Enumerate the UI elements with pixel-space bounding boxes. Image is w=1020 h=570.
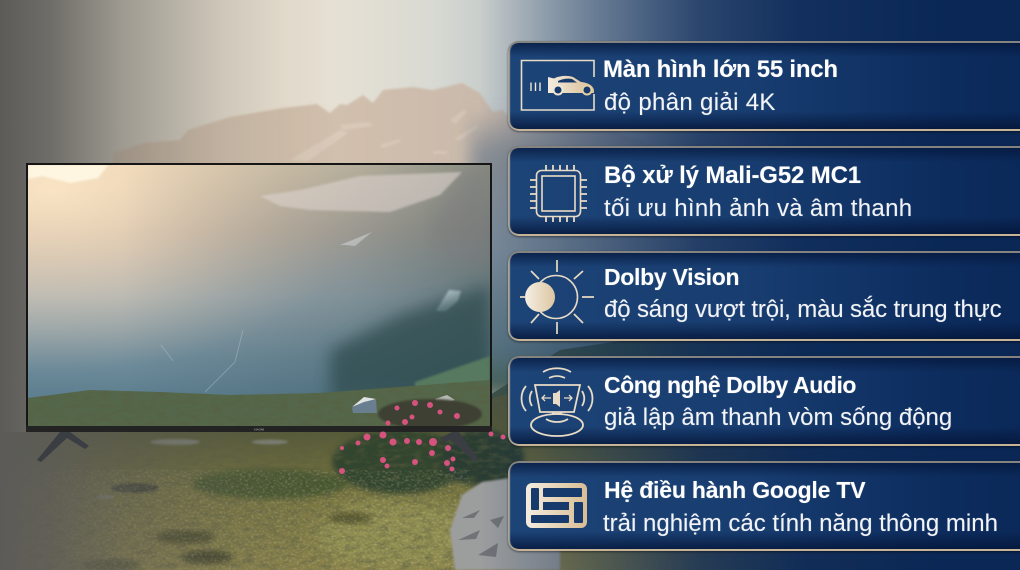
panel: operating system (508, 461, 1020, 551)
tv screen landscape (28, 165, 490, 429)
panel: processor (508, 146, 1020, 236)
text: Dolby Audio detail: giả lập âm thanh vòm sống động (604, 404, 952, 431)
icon: chip (530, 165, 587, 222)
icon: sun and circle (520, 260, 594, 334)
heading: Dolby Vision: Dolby Vision (604, 264, 739, 290)
text: processor detail: tối ưu hình ảnh và âm thanh (604, 195, 912, 222)
text: operating system detail: trải nghiệm các tính năng thông minh (603, 510, 998, 537)
background landscape (13, 0, 804, 570)
panel: Dolby Audio (508, 356, 1020, 446)
heading: operating system: Hệ điều hành Google TV (604, 477, 865, 503)
panel: Dolby Vision (508, 251, 1020, 341)
tv frame (26, 163, 492, 432)
heading: processor: Bộ xử lý Mali-G52 MC1 (604, 162, 861, 189)
tv stand: left leg (37, 432, 89, 462)
pink rhododendron flowers (339, 400, 506, 474)
icon: Google TV layout (526, 483, 587, 528)
panel: screen size (508, 41, 1020, 131)
icon: car on screen (520, 60, 595, 111)
tv stand: right leg (440, 432, 479, 462)
heading: screen size: Màn hình lớn 55 inch (603, 56, 838, 83)
television (26, 163, 492, 462)
tv brand logo: XIAOMI (254, 428, 264, 432)
tv bottom bezel (26, 426, 492, 432)
heading: Dolby Audio: Công nghệ Dolby Audio (604, 372, 856, 398)
icon: surround speaker (520, 367, 594, 437)
text: resolution: độ phân giải 4K (604, 89, 776, 116)
text: Dolby Vision detail: độ sáng vượt trội, màu sắc trung thực (604, 296, 1002, 323)
